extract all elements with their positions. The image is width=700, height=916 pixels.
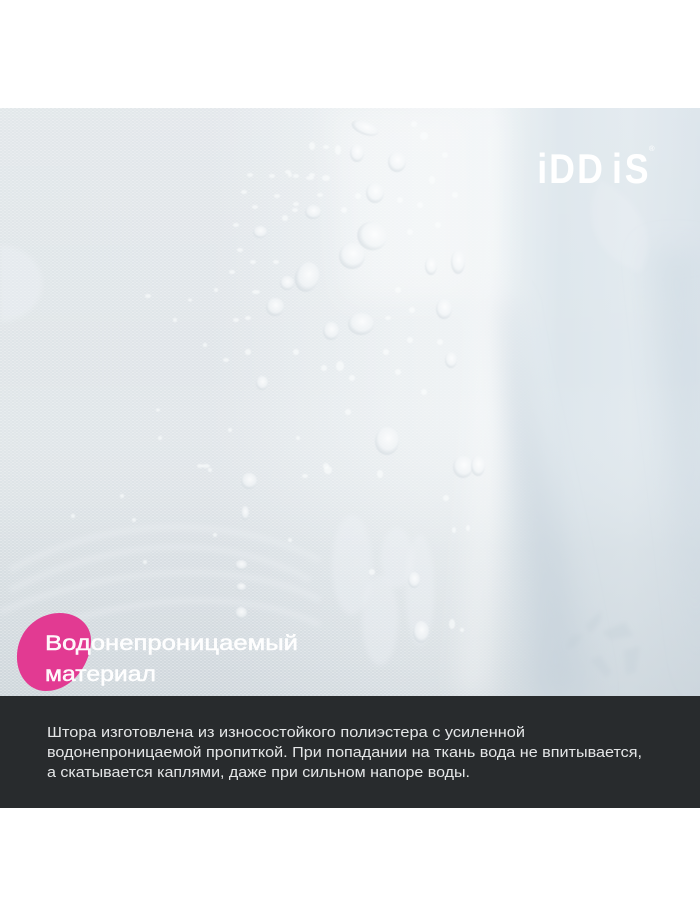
logo: IDDIS: ®: [649, 144, 655, 153]
description text: [47, 724, 642, 781]
printed floral pattern on fabric: [364, 566, 410, 600]
panel: wet curtain fabric photo: [0, 108, 700, 696]
description text: Штора изготовлена из износостойкого полиэстера с усиленной: [47, 724, 525, 741]
large droplets: [235, 117, 485, 643]
small droplets: [71, 121, 470, 632]
pink blob accent: [17, 613, 91, 691]
woven texture: [0, 294, 426, 696]
description text: а скатывается каплями, даже при сильном напоре воды.: [47, 764, 470, 781]
logo: IDDIS: iDDiS: [537, 146, 649, 193]
water droplets: [71, 117, 485, 643]
description text: водонепроницаемой пропиткой. При попадании на ткань вода не впитывается,: [47, 744, 642, 761]
curtain fold shadows: [469, 388, 556, 674]
dark description band: [0, 696, 700, 808]
heading: waterproof material: Водонепроницаемый: [45, 632, 298, 655]
heading: waterproof material: [45, 632, 298, 686]
heading: waterproof material: материал: [45, 663, 156, 686]
